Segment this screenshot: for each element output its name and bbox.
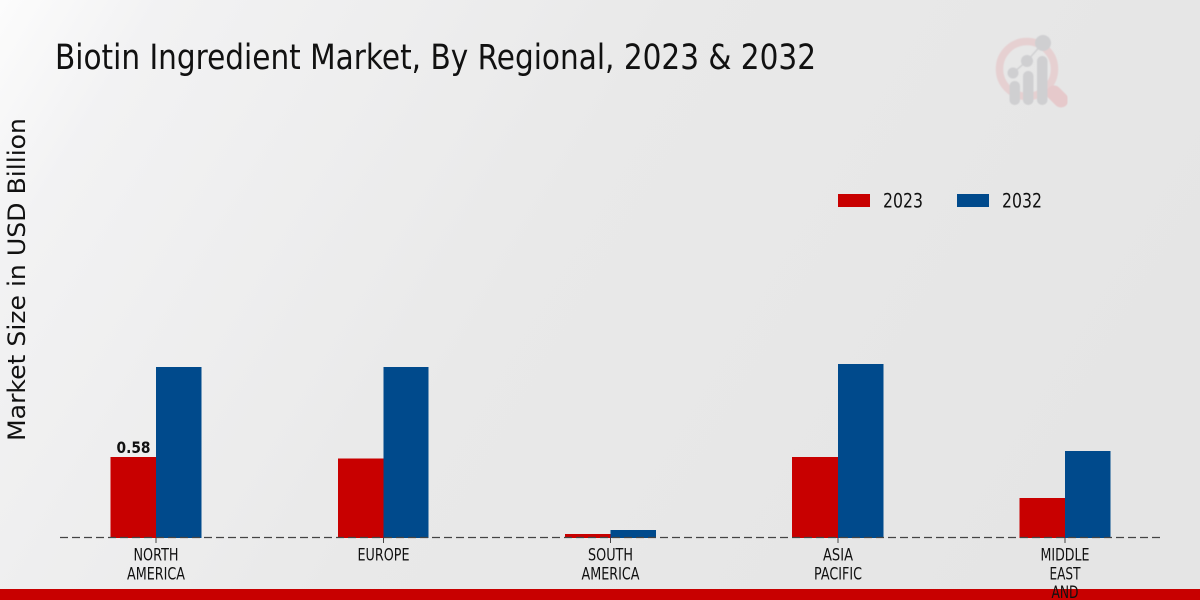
label: North America: AMERICA [127,564,186,584]
label: South America: SOUTH [588,546,633,564]
title: Biotin Ingredient Market, By Regional, 2023 & 2032 [55,38,816,78]
bars: South America [565,530,656,538]
y-axis label: Market Size in USD Billion [3,118,31,441]
bars: Middle East and Africa [1020,451,1110,538]
legend [838,190,1042,212]
label: Asia Pacific: PACIFIC [814,564,862,584]
bars: Europe [338,367,428,538]
legend item: 2032: 2032 [1002,190,1042,212]
bar chart [60,364,1160,543]
label: Middle East and: EAST [1050,564,1081,584]
label: Europe: EUROPE [358,546,410,564]
legend item: 2023: 2023 [883,190,923,212]
label: North America: NORTH [134,546,178,564]
value label: 0.58: 0.58 [116,438,150,457]
label: Asia Pacific: ASIA [823,546,854,564]
icon: watermark logo [1000,35,1061,105]
category labels [127,546,1090,600]
legend item: 2023 [838,190,923,212]
label: Middle East and: MIDDLE [1040,546,1090,564]
legend item: 2032 [957,190,1042,212]
baseline axis [60,536,1160,538]
bars: North America [110,367,202,538]
footer bar [0,589,1200,600]
bars: Asia Pacific [792,364,884,538]
label: South America: AMERICA [582,564,640,584]
